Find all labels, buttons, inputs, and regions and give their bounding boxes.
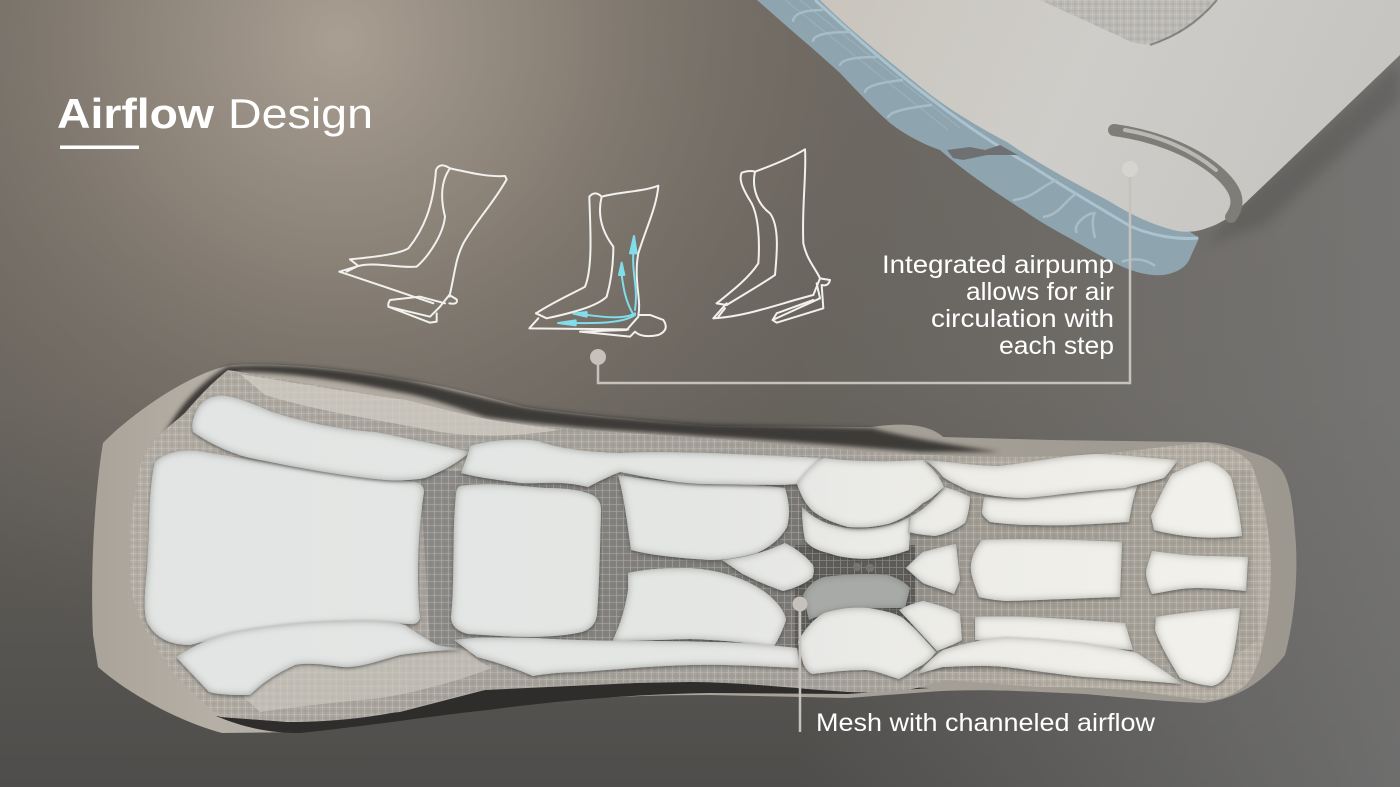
air nubs: [853, 563, 874, 572]
pad: upper ball: [797, 458, 944, 528]
pad: upper heel bolster: [192, 396, 470, 480]
pad: toe under: [802, 507, 911, 559]
pad: lower strip: [975, 617, 1133, 650]
pad: lower ball: [798, 608, 936, 679]
pad: long centre: [971, 539, 1122, 601]
dark gap: top: [150, 365, 1000, 470]
mesh window: [1040, 0, 1217, 44]
pad: upper forefoot: [618, 475, 789, 560]
pad: heel: [145, 450, 424, 645]
insole photo: top-right view of pump and outsole: [757, 0, 1400, 275]
foot 2: flat with airflow arrows: [529, 186, 666, 337]
dark gap: bottom: [216, 680, 930, 733]
pull handle: [1114, 130, 1237, 217]
pad: lower long: [917, 637, 1182, 684]
callout text: airpump: Integrated airpump: [882, 251, 1114, 279]
airflow arrows: [558, 236, 637, 325]
lower fold: [244, 650, 492, 712]
dark centre pocket: [795, 545, 915, 650]
callout text: airpump: [882, 251, 1114, 360]
pad: mid right: [1146, 551, 1248, 594]
pad: toe lower centre: [803, 574, 910, 620]
pad: upper arch strip: [461, 440, 822, 487]
pad: triangle: [906, 544, 960, 594]
title: Design: [228, 90, 373, 137]
pad: midfoot: [451, 484, 601, 637]
pad: right of toe: [909, 487, 970, 536]
callout text: mesh: Mesh with channeled airflow: [816, 709, 1156, 737]
foot diagrams: [339, 149, 830, 337]
foot 3: heel lifted: [713, 149, 830, 323]
pad: diamond: [722, 543, 814, 591]
foot 1: toe lifted: [339, 165, 507, 323]
pad: lower forefoot: [612, 568, 786, 648]
shoe cutaway: [92, 364, 1296, 733]
title: [57, 90, 373, 149]
pad: small cream: [899, 601, 962, 651]
title: Airflow: [57, 90, 214, 137]
foam pads: [145, 396, 1248, 695]
insole shadow: [1205, 60, 1400, 245]
top rim lighter fold: [240, 374, 560, 436]
outer shell: [92, 364, 1296, 733]
pad: top long strip: [925, 454, 1178, 498]
pad: lower right: [1155, 608, 1240, 686]
callout text: airpump: each step: [999, 332, 1114, 360]
mesh liner: [129, 370, 1271, 722]
callout: mesh leader: [792, 596, 808, 732]
pad: lower heel bolster: [176, 621, 465, 695]
outsole: blue tread: [757, 0, 1199, 275]
pad: top right corner: [1151, 461, 1242, 538]
pad: under long upper: [982, 484, 1138, 525]
callout text: airpump: allows for air: [966, 278, 1114, 306]
callout text: airpump: circulation with: [931, 305, 1114, 333]
worn patch: [947, 145, 1018, 160]
callout: airpump leader: [590, 161, 1138, 383]
insole body: [820, 0, 1400, 232]
pad: lower arch strip: [454, 638, 800, 676]
